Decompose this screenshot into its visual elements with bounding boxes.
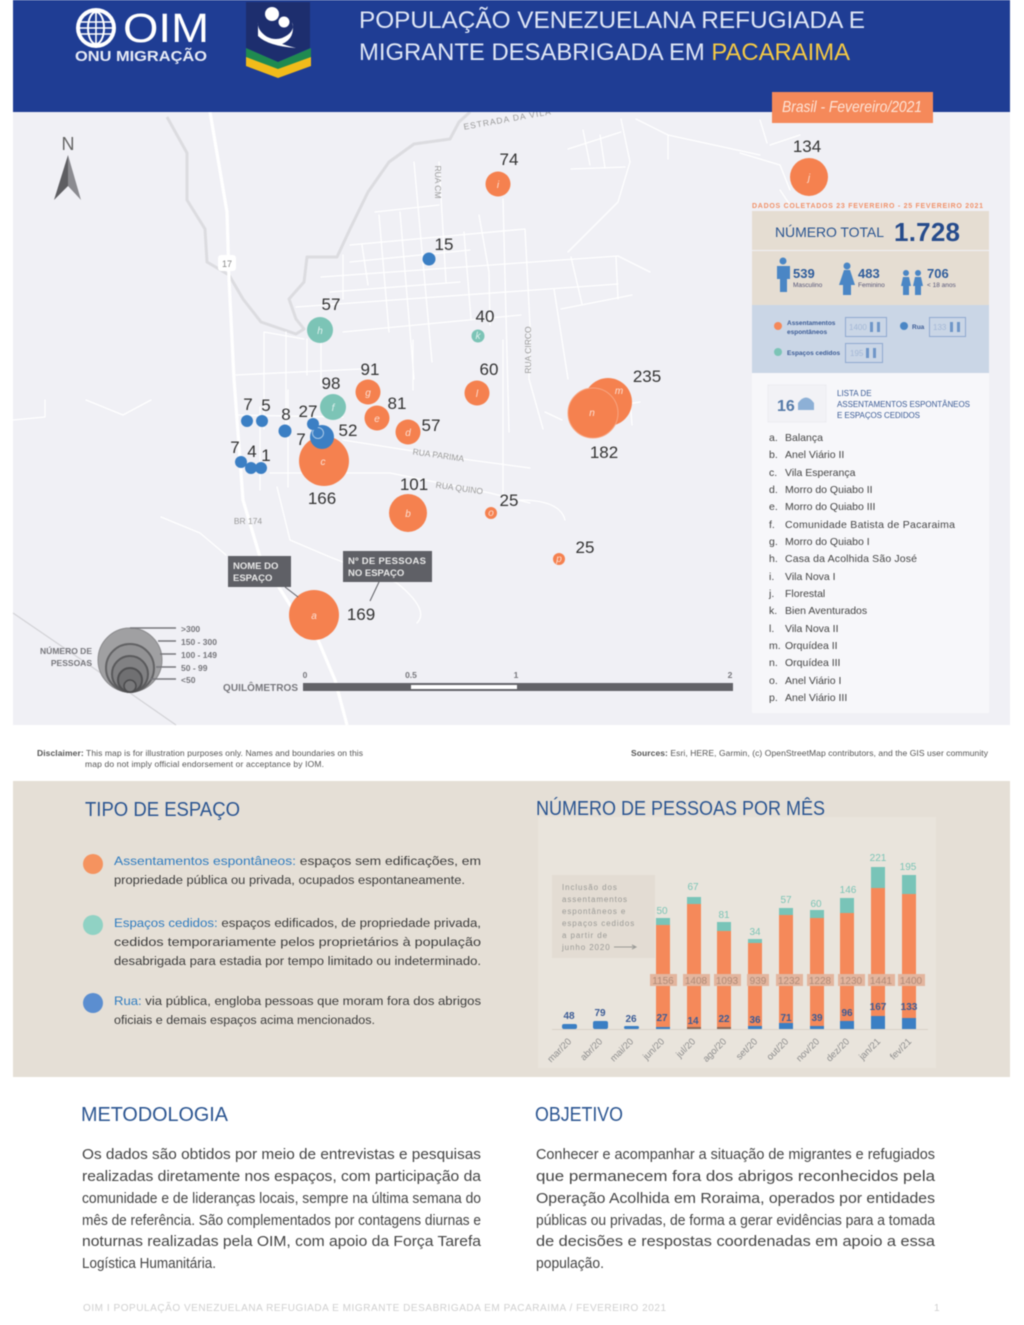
bubble: l 60: l [476, 389, 479, 400]
legend: número de pessoas: PESSOAS [51, 658, 92, 668]
legend: número de pessoas: NÚMERO DE [40, 645, 92, 656]
callout: nome do espaço: NOME DO [233, 561, 278, 572]
legend: número de pessoas [40, 624, 217, 692]
legend: número de pessoas: 100 - 149 [181, 650, 217, 660]
bubble: street 27: 27 [299, 402, 317, 421]
orange value labels: 1230 [840, 976, 863, 987]
bubble: j 134: 134 [793, 137, 821, 156]
list entries: k. [769, 605, 777, 617]
list entries: l. [769, 623, 774, 635]
text: objetivo: Conhecer e acompanhar a situação de migrantes e refugiados [536, 1147, 935, 1163]
chart note: assentamentos [562, 895, 628, 904]
list entries: Morro do Quiabo III [785, 501, 875, 513]
bubble: e 81 [364, 394, 406, 430]
bubble: p 25: p [555, 554, 562, 565]
month axis labels: abr/20 [578, 1036, 605, 1063]
type: espaços cedidos [83, 915, 481, 968]
scale bar: 0.5 [405, 670, 417, 680]
list entries: Anel Viário II [785, 449, 844, 461]
legend: espaços cedidos: Espaços cedidos [787, 350, 840, 357]
bubble: h 57 [307, 295, 340, 343]
bubble: o 25 [485, 491, 518, 519]
panel: space type and monthly chart [13, 781, 1010, 1077]
month axis labels: ago/20 [701, 1036, 729, 1065]
bubble: street 7 west [230, 438, 247, 468]
bubble: g 91 [356, 360, 380, 404]
footer [83, 1301, 940, 1314]
list entries: Casa da Acolhida São José [785, 553, 917, 565]
disclaimer: Disclaimer: This map is for illustration purposes only. Names and boundaries on this [37, 748, 363, 758]
list entries: Anel Viário III [785, 692, 847, 704]
orange value labels: 1232 [778, 976, 801, 987]
callout: nome do espaço [228, 556, 298, 597]
list heading: ASSENTAMENTOS ESPONTÂNEOS [837, 400, 970, 409]
teal value labels: 221 [870, 853, 887, 864]
legend: rua: Rua [912, 324, 925, 331]
list entries [768, 432, 955, 704]
tag: date: Brasil - Fevereiro/2021 [782, 99, 922, 116]
teal value labels: 195 [900, 862, 917, 873]
text: objetivo: públicas ou privadas, de forma a gerar evidências para a tomada [536, 1213, 935, 1229]
list entries: o. [769, 675, 778, 687]
data collection dates: DADOS COLETADOS 23 FEVEREIRO - 25 FEVEREIRO 2021 [752, 203, 983, 210]
heading: número de pessoas por mês: NÚMERO DE PESSOAS POR MÊS [536, 797, 825, 820]
map: street grid [13, 119, 800, 623]
bubble: street 1: 1 [261, 446, 271, 465]
map: highway [210, 112, 347, 725]
month axis labels: mai/20 [608, 1036, 636, 1064]
teal value labels: 50 [656, 906, 668, 917]
bubble: j 134: j [806, 173, 811, 184]
callout: número de pessoas no espaço: Nº DE PESSOAS [348, 556, 426, 567]
bubble: street 52 [310, 421, 357, 449]
bubble: h 57: h [317, 326, 323, 337]
blue value labels: 39 [811, 1013, 823, 1024]
blue value labels: 36 [749, 1015, 761, 1026]
sources: Sources: Esri, HERE, Garmin, (c) OpenStreetMap contributors, and the GIS user community [631, 748, 989, 758]
bubble: o 25: 25 [500, 491, 518, 510]
bubble: h 57: 57 [322, 295, 340, 314]
bubble: j 134 [790, 137, 828, 196]
bubble: b 101 [389, 475, 428, 532]
bars: street only months [562, 1021, 639, 1029]
bubble: k 40 [472, 307, 494, 342]
bubble: o 25: o [488, 508, 494, 519]
stat: menores de 18 anos [901, 266, 956, 295]
text: metodologia: noturnas realizadas pela OIM, com apoio da Força Tarefa [82, 1234, 481, 1250]
disclaimer: map do not imply official endorsement or acceptance by IOM. [85, 759, 324, 769]
bubble: i 74: 74 [500, 150, 518, 169]
bubble: g 91: 91 [361, 360, 379, 379]
blue value labels: 133 [901, 1002, 918, 1013]
blue value labels: 48 [563, 1011, 575, 1022]
callout: nome do espaço: ESPAÇO [233, 573, 272, 584]
bubble: g 91: g [365, 388, 371, 399]
road label: Rua CM: RUA CM [433, 165, 443, 199]
bubble: street 7 north [241, 395, 253, 427]
list entries: d. [769, 484, 778, 496]
text: objetivo: população. [536, 1256, 604, 1272]
scale bar: 2 [728, 670, 733, 680]
blue value labels: 27 [656, 1013, 668, 1024]
legend: espaços cedidos [774, 344, 882, 362]
bars: teal ceded spaces [656, 867, 916, 943]
bubble: d 57 [396, 416, 440, 444]
icon: north arrow: N [62, 134, 74, 154]
bubble: d 57: d [405, 428, 411, 439]
list entries: b. [769, 449, 778, 461]
legend: assentamentos espontâneos: espontâneos [787, 329, 827, 336]
bubble: i 74 [486, 150, 518, 196]
footer: 1 [934, 1303, 940, 1314]
bubble: street 27 [299, 402, 319, 430]
callout: número de pessoas no espaço [343, 551, 432, 601]
bubble: street 8 [278, 405, 292, 438]
total number: NÚMERO TOTAL [775, 224, 884, 240]
orange value labels: 1408 [685, 976, 708, 987]
stat: masculino: 539 [793, 266, 815, 281]
bubble: i 74: i [497, 180, 500, 191]
callout: número de pessoas no espaço: NO ESPAÇO [348, 568, 404, 579]
chart note: espontâneos e [562, 907, 626, 916]
disclaimer [37, 748, 363, 769]
list entries: f. [769, 519, 775, 531]
bubble: m 235 [584, 367, 661, 426]
road label: Estrada da Vila: ESTRADA DA VILA [463, 106, 552, 132]
legend: assentamentos espontâneos: Assentamentos [787, 320, 836, 327]
legend: assentamentos espontâneos: 1400 [849, 323, 867, 332]
bubble: a 169 [289, 590, 375, 640]
month axis labels: mar/20 [545, 1036, 574, 1065]
panel: totals [752, 211, 989, 373]
stat: feminino [839, 262, 885, 295]
list entries: h. [769, 553, 778, 565]
text: metodologia: comunidade e de lideranças locais, sempre na última semana do [82, 1191, 481, 1207]
bar chart: people per month [538, 817, 936, 1068]
title [359, 7, 865, 66]
road label: Rua Circo: RUA CIRCO [523, 326, 533, 374]
bubble: e 81: 81 [388, 394, 406, 413]
orange value labels: 1156 [652, 976, 674, 987]
list heading: LISTA DE [837, 389, 872, 398]
bubble: street 52: 52 [339, 421, 357, 440]
stat: menores de 18 anos: < 18 anos [927, 282, 956, 289]
legend: número de pessoas: >300 [181, 624, 200, 634]
type: assentamentos espontâneos: Assentamentos espontâneos: espaços sem edificações, em [114, 854, 481, 868]
chart baseline [552, 1028, 928, 1030]
list entries: j. [768, 588, 774, 600]
bubble: street 7 west: 7 [230, 438, 240, 457]
stat: feminino: 483 [858, 266, 880, 281]
orange value labels: 1441 [870, 976, 893, 987]
road badge: 17 [218, 255, 236, 271]
text: objetivo: de decisões e respostas coordenadas em apoio a essa [536, 1234, 935, 1250]
legend: número de pessoas: <50 [181, 675, 196, 685]
list entries: Florestal [785, 588, 825, 600]
text: metodologia: realizadas diretamente nos espaços, com participação da [82, 1169, 481, 1185]
chart note: Inclusão dos [562, 883, 618, 892]
text: objetivo: Operação Acolhida em Roraima, operados por entidades [536, 1191, 935, 1207]
blue value labels: 71 [780, 1013, 792, 1024]
legend: rua: 133 [933, 323, 947, 332]
orange value labels: 939 [750, 976, 767, 987]
type: assentamentos espontâneos: propriedade pública ou privada, ocupados espontaneamente. [114, 873, 465, 887]
tag: date [772, 92, 933, 123]
title: POPULAÇÃO VENEZUELANA REFUGIADA E [359, 7, 865, 34]
blue value labels: 79 [594, 1008, 606, 1019]
type: rua [83, 993, 481, 1027]
list entries: m. [769, 640, 781, 652]
bubble: c 166 [299, 436, 349, 508]
list entries: p. [769, 692, 778, 704]
list entries: Orquídea III [785, 657, 840, 669]
logo: OIM: ONU MIGRAÇÃO [75, 47, 207, 65]
scale bar: 1 [514, 670, 519, 680]
legend: número de pessoas: 50 - 99 [181, 663, 208, 673]
title: MIGRANTE DESABRIGADA EM PACARAIMA [359, 39, 850, 66]
footer: OIM I POPULAÇÃO VENEZUELANA REFUGIADA E MIGRANTE DESABRIGADA EM PACARAIMA / FEVEREIRO 2021 [83, 1301, 666, 1314]
bubble: n 182 [568, 388, 618, 462]
chart note: espaços cedidos [562, 919, 635, 928]
count: 16 settlements: 16 [777, 398, 795, 415]
bubble: street 15 [422, 235, 453, 266]
list entries: Vila Esperança [785, 467, 856, 479]
text: metodologia: Logística Humanitária. [82, 1256, 216, 1272]
list entries: a. [769, 432, 778, 444]
bubble: street 7 north: 7 [243, 395, 253, 414]
orange value labels [650, 974, 925, 987]
stat: menores de 18 anos: 706 [927, 266, 949, 281]
scale bar: QUILÔMETROS [223, 681, 298, 694]
label: street 7 centre: 7 [296, 430, 306, 449]
blue value labels: 96 [841, 1008, 853, 1019]
type: rua: oficiais e demais espaços acima mencionados. [114, 1013, 375, 1027]
bubble: p 25 [553, 538, 594, 565]
road label: Rua Quino: RUA QUINO [435, 480, 484, 496]
month axis labels: dez/20 [824, 1036, 852, 1064]
scale bar: 0 [303, 670, 308, 680]
blue value labels: 167 [870, 1002, 887, 1013]
bubble: street 4: 4 [247, 442, 257, 461]
bubble: street 4 [245, 442, 257, 474]
orange value labels: 1228 [809, 976, 832, 987]
logo: OIM [75, 5, 209, 65]
heading: tipo de espaço: TIPO DE ESPAÇO [85, 799, 240, 821]
month axis labels: jun/20 [640, 1036, 667, 1063]
bubble: e 81: e [374, 414, 380, 425]
bubble: a 169: a [311, 611, 317, 622]
chart note: a partir de [562, 931, 608, 940]
list entries: g. [769, 536, 778, 548]
blue value labels [563, 1002, 918, 1027]
month axis labels [545, 1036, 914, 1065]
bubble: c 166: c [320, 457, 326, 468]
legend: rua [900, 318, 966, 336]
list entries: Comunidade Batista de Pacaraima [785, 519, 955, 531]
icon: north arrow [54, 134, 81, 200]
month axis labels: nov/20 [794, 1036, 822, 1064]
map: boundary line [13, 613, 176, 725]
list entries: Morro do Quiabo I [785, 536, 870, 548]
bars: orange spontaneous settlements [656, 888, 916, 1027]
legend: número de pessoas: 150 - 300 [181, 637, 217, 647]
month axis labels: out/20 [765, 1036, 791, 1063]
month axis labels: jul/20 [674, 1036, 698, 1061]
road badge: 17: 17 [222, 259, 232, 269]
list entries: Vila Nova II [785, 623, 838, 635]
bubble: n 182: 182 [590, 443, 618, 462]
text: metodologia: mês de referência. São complementados por contagens diurnas e [82, 1213, 481, 1229]
stat: masculino: Masculino [793, 282, 823, 289]
bubble: street 1 [255, 446, 271, 474]
road label: BR 174: BR 174 [234, 516, 262, 526]
list heading: E ESPAÇOS CEDIDOS [837, 411, 920, 420]
map: river [167, 112, 470, 334]
chart note: junho 2020 [561, 943, 611, 952]
legend: espaços cedidos: 195 [850, 349, 864, 358]
legend: assentamentos espontâneos [774, 318, 886, 336]
bubble: b 101: b [405, 509, 411, 520]
panel: list of settlements [752, 373, 989, 713]
teal value labels: 67 [687, 882, 699, 893]
panel: map [13, 106, 1010, 725]
count: 16 settlements [768, 385, 826, 422]
logo: Operação Acolhida shield [246, 2, 311, 78]
logo: OIM: OIM [123, 5, 209, 51]
list entries: c. [769, 467, 777, 479]
list entries: e. [769, 501, 778, 513]
stat: masculino [777, 258, 823, 292]
month axis labels: jan/21 [856, 1036, 883, 1063]
orange value labels: 1093 [716, 976, 739, 987]
bubble: street 15: 15 [435, 235, 453, 254]
bubble: l 60: 60 [480, 360, 498, 379]
bubble: n 182: n [589, 408, 595, 419]
text: metodologia: Os dados são obtidos por meio de entrevistas e pesquisas [82, 1147, 481, 1163]
type: espaços cedidos: desabrigada para estadia por tempo limitado ou indeterminado. [114, 954, 481, 968]
teal value labels: 81 [718, 910, 730, 921]
orange value labels: 1400 [900, 976, 923, 987]
heading: objetivo: OBJETIVO [535, 1104, 623, 1126]
bars: blue street [656, 1016, 916, 1029]
road label: Rua Parima: RUA PARIMA [412, 446, 465, 464]
scale bar [223, 670, 733, 694]
bubble: k 40: k [476, 331, 482, 342]
panel: header [13, 0, 1010, 123]
month axis labels: set/20 [734, 1036, 760, 1062]
bubble: l 60 [464, 360, 498, 406]
bubble: street 5 [256, 396, 271, 427]
teal value labels: 57 [780, 895, 792, 906]
blue value labels: 26 [625, 1014, 637, 1025]
list entries: Vila Nova I [785, 571, 836, 583]
month axis labels: fev/21 [888, 1036, 914, 1062]
blue value labels: 14 [687, 1016, 699, 1027]
teal value labels [656, 853, 917, 938]
total number: 1.728 [894, 217, 960, 247]
teal value labels: 60 [810, 899, 822, 910]
list entries: Orquídea II [785, 640, 838, 652]
bubble: street 5: 5 [261, 396, 271, 415]
bubble: c 166: 166 [308, 489, 336, 508]
list entries: Balança [785, 432, 823, 444]
stat: feminino: Feminino [858, 282, 885, 289]
bubble: a 169: 169 [347, 605, 375, 624]
bubble: f 98: f [332, 403, 336, 414]
heading: metodologia: METODOLOGIA [81, 1104, 229, 1126]
text: objetivo [536, 1147, 935, 1272]
bubble: f 98: 98 [322, 374, 340, 393]
bubble: k 40: 40 [476, 307, 494, 326]
type: rua: Rua: via pública, engloba pessoas que moram fora dos abrigos [114, 994, 481, 1008]
bubble: f 98 [320, 374, 346, 420]
type: espaços cedidos: Espaços cedidos: espaços edificados, de propriedade privada, [114, 916, 481, 930]
text: objetivo: que permanecem fora dos abrigos reconhecidos pela [536, 1169, 935, 1185]
type: espaços cedidos: cedidos temporariamente pelos proprietários à população [114, 935, 481, 949]
bubble: m 235: m [615, 386, 623, 397]
bubble: d 57: 57 [422, 416, 440, 435]
blue value labels: 22 [718, 1014, 730, 1025]
list entries: i. [769, 571, 774, 583]
bubble: street 8: 8 [281, 405, 291, 424]
list entries: n. [769, 657, 778, 669]
type: assentamentos espontâneos [83, 854, 481, 887]
bubble: b 101: 101 [400, 475, 428, 494]
total number [775, 217, 960, 247]
list entries: Bien Aventurados [785, 605, 867, 617]
teal value labels: 146 [840, 885, 857, 896]
teal value labels: 34 [749, 927, 761, 938]
chart note [552, 875, 655, 958]
bubble: p 25: 25 [576, 538, 594, 557]
list entries: Morro do Quiabo II [785, 484, 873, 496]
list entries: Anel Viário I [785, 675, 841, 687]
text: metodologia [82, 1147, 481, 1272]
list heading [837, 389, 970, 420]
bubble: m 235: 235 [633, 367, 661, 386]
